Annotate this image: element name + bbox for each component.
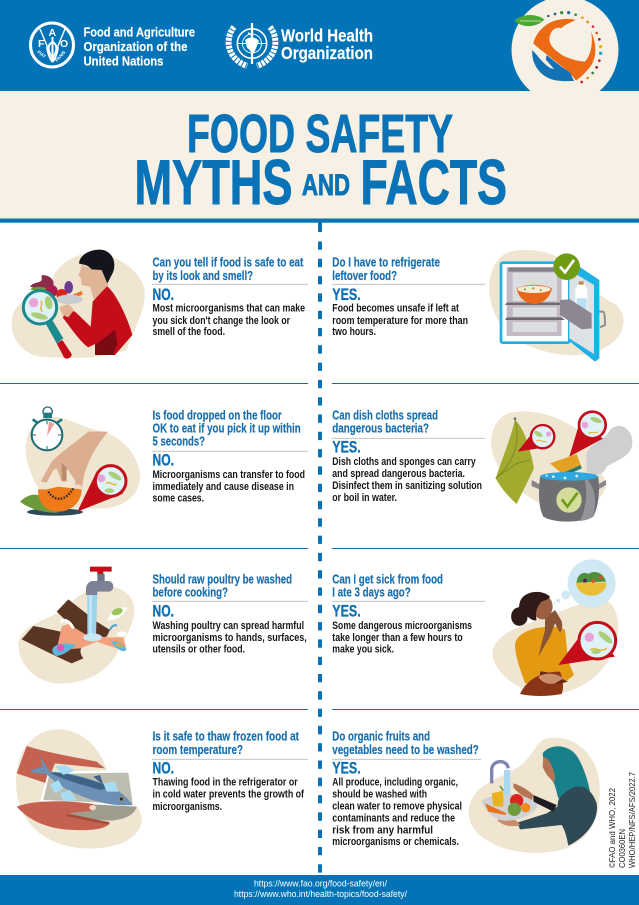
logo: FAO emblem: [30, 23, 74, 67]
question: Do organic fruits and: [332, 729, 430, 744]
explanation: [152, 620, 307, 656]
explanation: [152, 303, 305, 338]
organisation name: WHO: World Health: [281, 26, 373, 46]
footer with links: https://www.who.int/health-topics/food-safety/: [234, 889, 407, 899]
answer: NO.: [152, 450, 174, 469]
explanation: and spread dangerous bacteria.: [332, 468, 465, 480]
question: [332, 729, 479, 757]
explanation: you sick don't change the look or: [152, 315, 290, 327]
title line 1: FOOD SAFETY: [187, 105, 453, 164]
answer: NO.: [152, 285, 174, 304]
illustration: hands holding tray of fish on ice: [16, 729, 142, 849]
question: Is food dropped on the floor: [152, 408, 282, 422]
question: before cooking?: [152, 585, 228, 600]
logo: World Food Safety Day heart and hand: [512, 0, 618, 91]
illustration: hands washing under tap: [18, 567, 134, 684]
title line 2: [134, 148, 507, 218]
title panel: [0, 91, 639, 218]
question: [152, 408, 301, 448]
explanation: Food becomes unsafe if left at: [332, 303, 459, 315]
footer with links: [0, 875, 639, 905]
explanation: utensils or other food.: [152, 644, 245, 656]
logo: WHO emblem: [229, 23, 275, 66]
panel: look and smell: [12, 250, 305, 359]
illustration: open refrigerator: [489, 250, 623, 362]
explanation: Some dangerous microorganisms: [332, 620, 472, 632]
answer: YES.: [332, 438, 361, 457]
explanation: Washing poultry can spread harmful: [152, 620, 304, 632]
question: I ate 3 days ago?: [332, 585, 411, 600]
logo: FAO emblem: PANIS: [54, 50, 67, 63]
illustration: woman in hijab washing vegetables: [469, 738, 600, 853]
panel: food dropped on floor: [20, 407, 305, 516]
question: Can you tell if food is safe to eat: [152, 255, 304, 270]
explanation: smell of the food.: [152, 326, 225, 338]
answer: YES.: [332, 285, 361, 304]
explanation: [152, 469, 305, 505]
question: vegetables need to be washed?: [332, 742, 479, 757]
explanation: [332, 303, 468, 338]
answer: YES.: [332, 758, 361, 777]
explanation: Disinfect them in sanitizing solution: [332, 480, 482, 492]
panel: food from 3 days ago: [332, 559, 618, 696]
panel: thawing frozen food: [16, 729, 304, 849]
explanation: microorganisms to hands, surfaces,: [152, 632, 307, 644]
explanation: some cases.: [152, 493, 204, 505]
illustration: stopwatch and hand picking up papaya: [20, 407, 140, 516]
title line 2: AND: [302, 169, 350, 202]
question: Can I get sick from food: [332, 571, 443, 586]
question: [332, 408, 438, 436]
logo: FAO emblem: FIAT: [36, 49, 47, 59]
organisation name: WHO: [281, 26, 373, 63]
explanation: or boil in water.: [332, 492, 397, 504]
organisation name: FAO: [84, 25, 195, 69]
explanation: two hours.: [332, 326, 376, 338]
explanation: immediately and cause disease in: [152, 481, 294, 493]
explanation: clean water to remove physical: [332, 801, 462, 813]
question: [152, 255, 304, 283]
organisation name: FAO: Organization of the: [84, 39, 188, 54]
explanation: [332, 620, 472, 656]
copyright and document codes: ©FAO and WHO, 2022: [607, 788, 617, 868]
question: leftover food?: [332, 268, 397, 283]
question: room temperature?: [152, 742, 243, 757]
explanation: Most microorganisms that can make: [152, 303, 305, 315]
question: by its look and smell?: [152, 268, 253, 283]
organisation name: FAO: United Nations: [84, 54, 164, 69]
organisation name: FAO: Food and Agriculture: [84, 25, 195, 40]
header band: [0, 0, 639, 91]
footer with links: https://www.fao.org/food-safety/en/: [254, 879, 387, 889]
panel: organic produce: [332, 729, 600, 853]
explanation: [332, 456, 482, 504]
explanation: Thawing food in the refrigerator or: [152, 777, 298, 789]
panel: raw poultry: [18, 567, 307, 684]
explanation: in cold water prevents the growth of: [152, 789, 304, 801]
question: Is it safe to thaw frozen food at: [152, 729, 300, 744]
title line 2: MYTHS: [134, 148, 292, 218]
copyright and document codes: CO0360EN: [617, 829, 627, 868]
question: dangerous bacteria?: [332, 421, 429, 436]
question: Do I have to refrigerate: [332, 255, 440, 270]
explanation: All produce, including organic,: [332, 777, 458, 789]
answer: NO.: [152, 758, 174, 777]
logo: FAO emblem: A: [48, 27, 56, 39]
question: OK to eat if you pick it up within: [152, 421, 301, 436]
question: Can dish cloths spread: [332, 408, 438, 422]
question: [152, 571, 292, 600]
answer: NO.: [152, 602, 174, 621]
explanation: risk from any harmful: [332, 824, 433, 836]
explanation: Microorganisms can transfer to food: [152, 469, 305, 481]
title line 2: FACTS: [360, 148, 507, 218]
question: [152, 729, 300, 757]
explanation: contaminants and reduce the: [332, 813, 455, 825]
answer: YES.: [332, 602, 361, 621]
question: [332, 255, 440, 283]
explanation: take longer than a few hours to: [332, 632, 463, 644]
explanation: Dish cloths and sponges can carry: [332, 456, 476, 468]
illustration: man smelling food with magnifier: [12, 250, 145, 359]
explanation: should be washed with: [332, 789, 427, 801]
question: Should raw poultry be washed: [152, 571, 292, 586]
explanation: room temperature for more than: [332, 315, 468, 327]
question: [332, 571, 443, 600]
question: 5 seconds?: [152, 433, 205, 448]
logo: FAO emblem: O: [60, 38, 68, 50]
explanation: microorganisms.: [152, 801, 222, 813]
copyright and document codes: WHO/HEP/NFS/AFS/2022.7: [627, 772, 637, 868]
explanation: [332, 777, 462, 848]
logo: FAO emblem: F: [38, 38, 45, 50]
illustration: woman thinking about salad: [493, 559, 618, 696]
copyright and document codes: [607, 772, 637, 868]
organisation name: WHO: Organization: [281, 43, 373, 63]
explanation: make you sick.: [332, 644, 394, 656]
panel: refrigerate leftovers: [332, 250, 623, 362]
explanation: [152, 777, 304, 813]
panel: dish cloths: [332, 408, 632, 522]
explanation: microorganisms or chemicals.: [332, 836, 459, 848]
illustration: cloth, sponge and boiling pot: [491, 411, 632, 522]
